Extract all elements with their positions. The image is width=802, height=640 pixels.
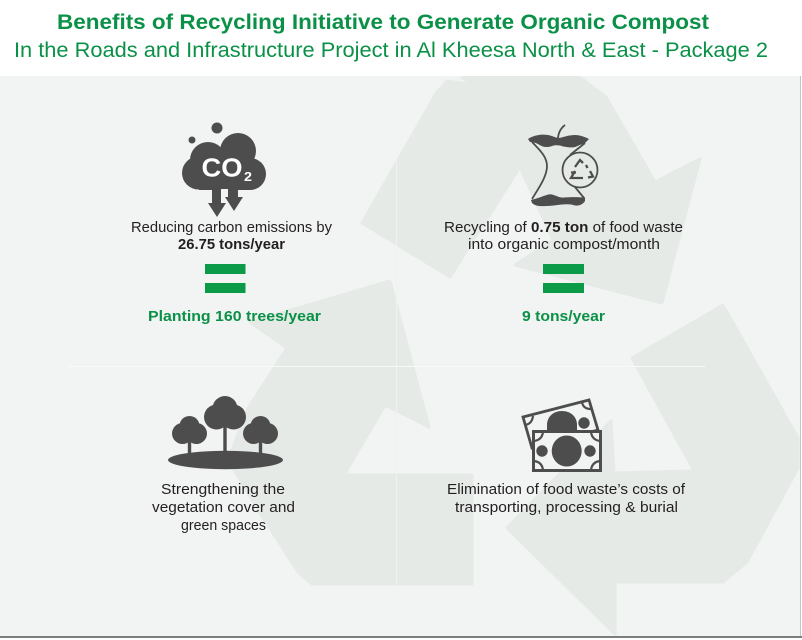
text: food waste costs: transporting, processing & burial — [455, 500, 678, 516]
text: vegetation: Strengthening the — [161, 482, 285, 498]
recycling watermark — [232, 78, 798, 634]
icon: CO2 cloud — [182, 122, 266, 217]
text: food waste: into organic compost/month — [468, 237, 660, 253]
vertical seam — [396, 160, 397, 586]
text: food waste costs — [447, 482, 686, 516]
result: planting trees: Planting 160 trees/year — [148, 309, 321, 325]
title: Benefits of Recycling Initiative to Generate Organic Compost — [57, 10, 709, 34]
text: vegetation — [152, 482, 295, 534]
right border — [800, 76, 801, 636]
text: vegetation: green spaces — [181, 518, 266, 534]
icon: equals sign left — [205, 264, 246, 293]
icon: equals sign right — [543, 264, 584, 293]
icon: trees — [168, 396, 283, 469]
text: carbon emissions: 26.75 tons/year — [178, 237, 285, 253]
text: carbon emissions — [131, 220, 333, 253]
icon: banknotes — [523, 400, 600, 470]
subtitle: In the Roads and Infrastructure Project in Al Kheesa North & East - Package 2 — [14, 39, 768, 62]
text: food waste: Recycling of 0.75 ton of food waste — [444, 220, 683, 236]
bottom border — [0, 636, 802, 638]
icon: CO2 cloud: CO — [202, 152, 242, 182]
icon: apple core with recycling badge — [528, 125, 598, 206]
result: tons per year: 9 tons/year — [522, 309, 605, 325]
text: vegetation: vegetation cover and — [152, 500, 295, 516]
watermark arrow: lower left — [232, 281, 472, 584]
divider — [68, 366, 705, 367]
text: food waste — [444, 220, 683, 253]
text: food waste costs: Elimination of food waste’s costs of — [447, 482, 686, 498]
watermark arrow: lower right — [507, 305, 798, 634]
text: carbon emissions: Reducing carbon emissions by — [131, 220, 333, 236]
watermark arrow: top — [362, 78, 700, 303]
icon: CO2 cloud: 2 — [244, 169, 252, 184]
